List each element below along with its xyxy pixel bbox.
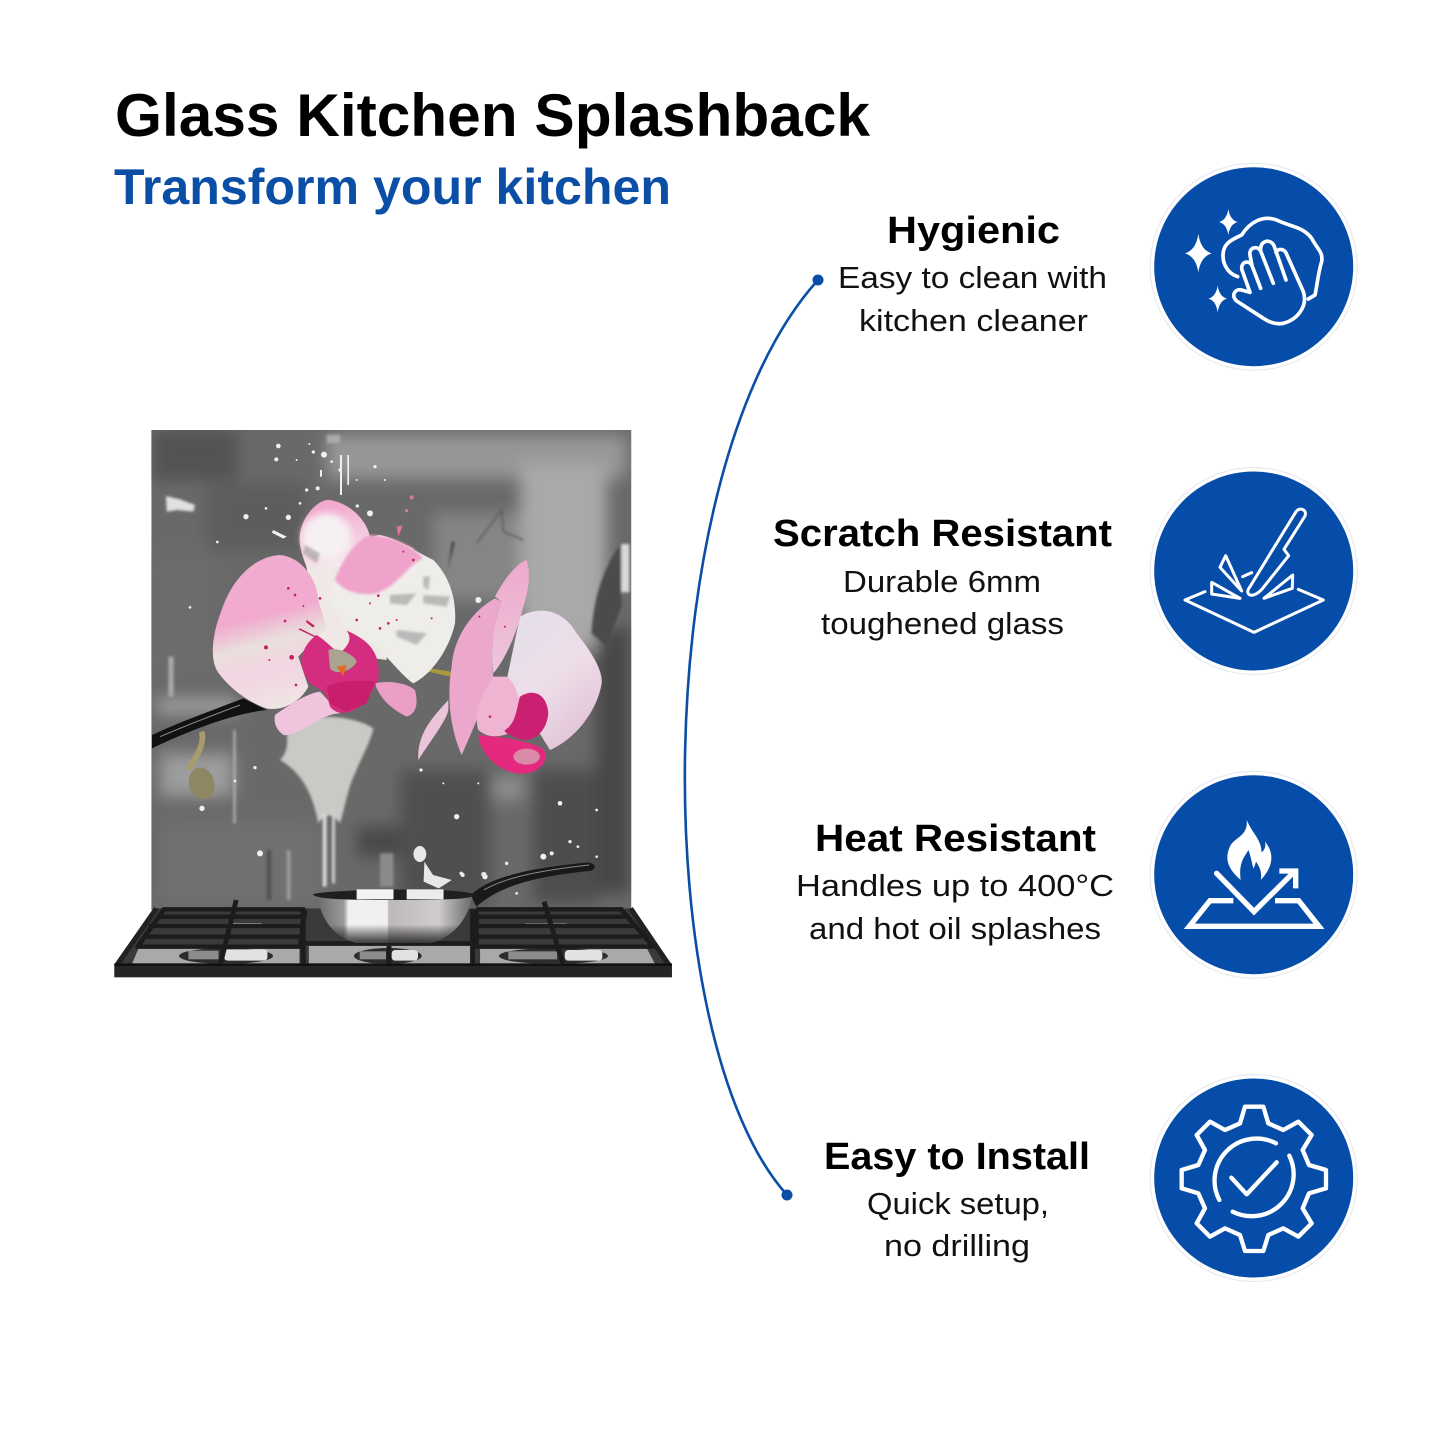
branch and seed pod <box>152 698 267 748</box>
white paint splatter <box>189 443 598 895</box>
icon: knife scratching glass <box>1150 468 1357 674</box>
heading: Hygienic: Hygienic <box>887 210 1060 252</box>
feature: Easy to Install <box>824 1136 1090 1263</box>
description: Heat Resistant <box>796 868 1114 946</box>
frying pan <box>471 863 595 907</box>
icon: cleaning hand with sparkles <box>1150 163 1357 370</box>
icon: gear with check mark <box>1150 1074 1357 1282</box>
title: Glass Kitchen Splashback <box>115 82 871 149</box>
large orchid flower <box>213 500 455 735</box>
description: Easy to Install: no drilling <box>884 1228 1030 1263</box>
description: Hygienic: Easy to clean with <box>838 260 1107 295</box>
description: Hygienic: kitchen cleaner <box>859 303 1088 338</box>
subtitle: Transform your kitchen <box>114 159 671 215</box>
description: Easy to Install <box>867 1186 1049 1263</box>
feature: Scratch Resistant <box>773 513 1112 641</box>
description: Scratch Resistant <box>821 564 1064 641</box>
description: Scratch Resistant: toughened glass <box>821 606 1064 641</box>
feature: Heat Resistant <box>796 818 1114 946</box>
orchid lip <box>302 631 379 713</box>
feature: Hygienic <box>838 210 1107 338</box>
description: Easy to Install: Quick setup, <box>867 1186 1049 1221</box>
painted splashback panel <box>151 430 631 910</box>
magenta splatter <box>264 495 506 718</box>
heading: Easy to Install: Easy to Install <box>824 1136 1090 1178</box>
product image: orchid splashback with hob <box>114 430 672 977</box>
icon: flame over glass <box>1150 771 1357 978</box>
description: Hygienic <box>838 260 1107 338</box>
description: Scratch Resistant: Durable 6mm <box>843 564 1041 599</box>
description: Heat Resistant: and hot oil splashes <box>809 911 1101 946</box>
description: Heat Resistant: Handles up to 400°C <box>796 868 1114 903</box>
heading: Heat Resistant: Heat Resistant <box>815 818 1096 860</box>
pan supports <box>138 900 653 964</box>
heading: Scratch Resistant: Scratch Resistant <box>773 513 1112 555</box>
connector arc with end dots <box>685 274 824 1200</box>
hob with pan <box>114 845 672 977</box>
small orchid flower <box>418 560 602 774</box>
burners <box>179 923 608 964</box>
